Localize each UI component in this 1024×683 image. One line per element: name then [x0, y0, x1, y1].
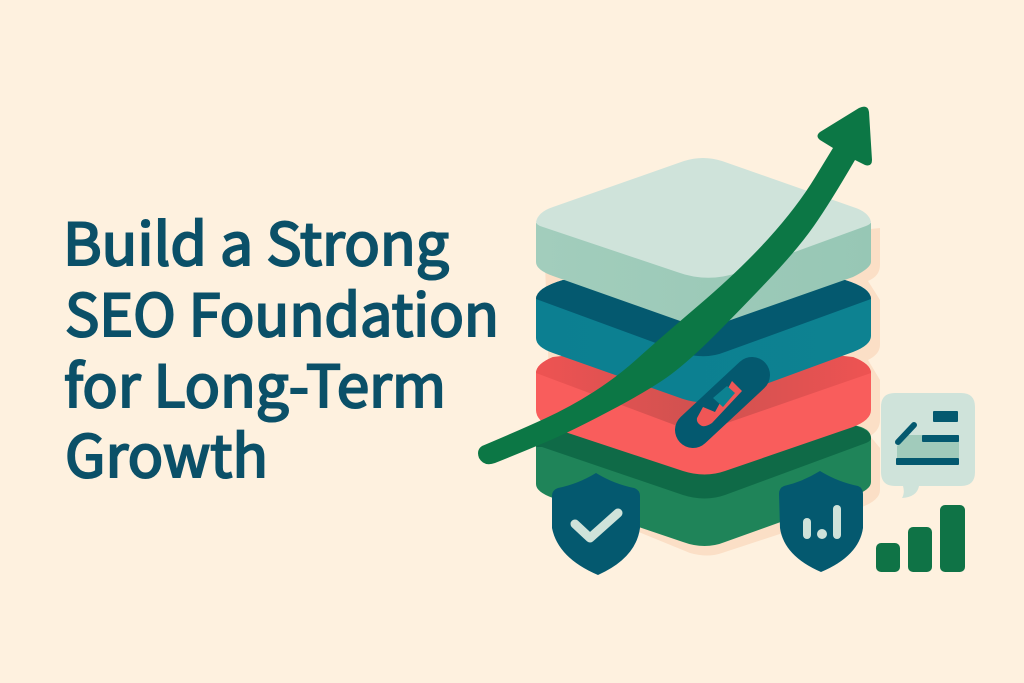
title: Growth — [65, 410, 268, 494]
title: SEO Foundation — [65, 269, 499, 353]
layer: teal slab — [536, 280, 871, 402]
icon: bandage — [693, 375, 752, 430]
layer: mint top slab — [536, 158, 871, 326]
title: Build a Strong — [63, 198, 449, 282]
layer: red slab — [536, 340, 871, 474]
growth arrow — [478, 107, 872, 464]
icon: shield with bars — [779, 471, 863, 572]
icon: speech bubble with document lines — [881, 393, 975, 498]
layer shadows — [545, 228, 880, 556]
layer: green foundation slab — [536, 420, 871, 546]
title: for Long-Term — [64, 340, 446, 424]
bar chart — [876, 505, 965, 572]
title — [63, 198, 499, 494]
icon: shield with check — [552, 473, 640, 575]
